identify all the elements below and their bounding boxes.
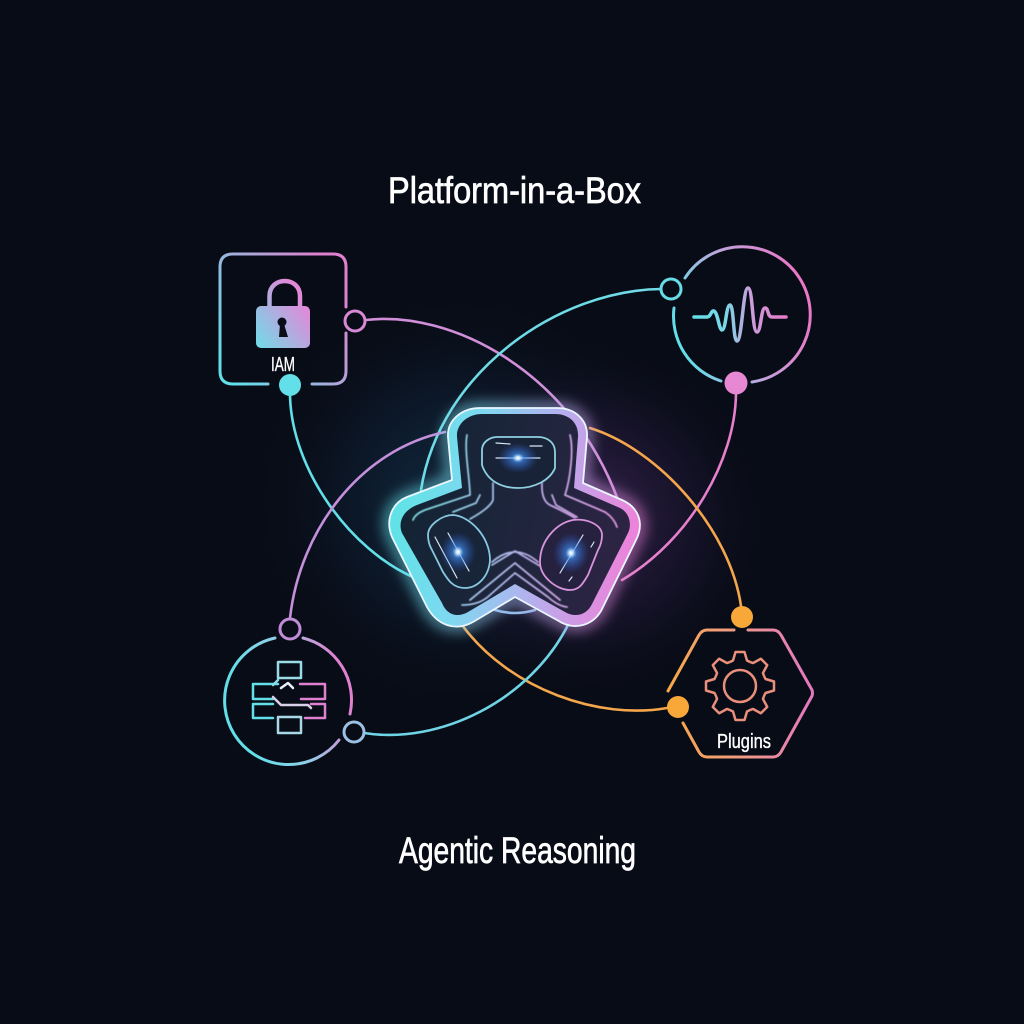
waveform ring [674,247,810,382]
core outer glow [389,408,640,627]
node: signal waveform [661,247,810,394]
pod light lines [435,443,594,581]
arc: plugins to core, orange top [590,428,741,606]
left pod spark [440,532,476,572]
workflow ring [225,638,352,765]
caption: Agentic Reasoning: Agentic Reasoning [399,830,636,871]
icon: waveform [694,288,786,341]
waveform hollow connector [661,279,681,299]
plugins top connector [731,606,753,628]
title: Platform-in-a-Box: Platform-in-a-Box [388,170,641,211]
waveform filled connector [724,372,748,394]
plugins left connector [667,696,689,718]
IAM square frame [220,254,346,384]
core contour lines [413,435,617,607]
arc: workflow to core, purple [290,432,445,618]
arc: notch under core [495,610,535,613]
IAM filled connector [279,374,301,396]
top pod [482,437,555,488]
workflow right connector [344,722,364,742]
workflow top connector [280,619,300,639]
icon: workflow handshake blocks [253,662,325,733]
arc: workflow to core, cyan [364,625,568,735]
core dark interior [401,414,630,615]
node: workflow [225,619,364,765]
IAM label: IAM [271,354,295,376]
top pod spark [498,443,538,473]
connecting arcs [290,289,741,735]
arc: waveform to core, cyan [421,289,661,490]
arc: waveform to core, pink [622,394,736,580]
right pod [540,520,602,590]
core gradient band [389,408,640,627]
arc: plugins to core, orange bottom [462,625,667,711]
right pod spark [553,533,589,573]
plugins hexagon frame [668,630,812,757]
icon: padlock [256,281,310,348]
node: plugins [667,606,812,757]
arc: IAM across top to core, pink [366,319,618,500]
arc: IAM to core, cyan [290,396,415,578]
left pod [428,515,490,588]
icon: gear [706,652,774,720]
IAM hollow connector [345,311,365,331]
plugins label: Plugins [717,731,771,753]
central core emblem [389,408,640,627]
node: IAM [220,254,365,396]
